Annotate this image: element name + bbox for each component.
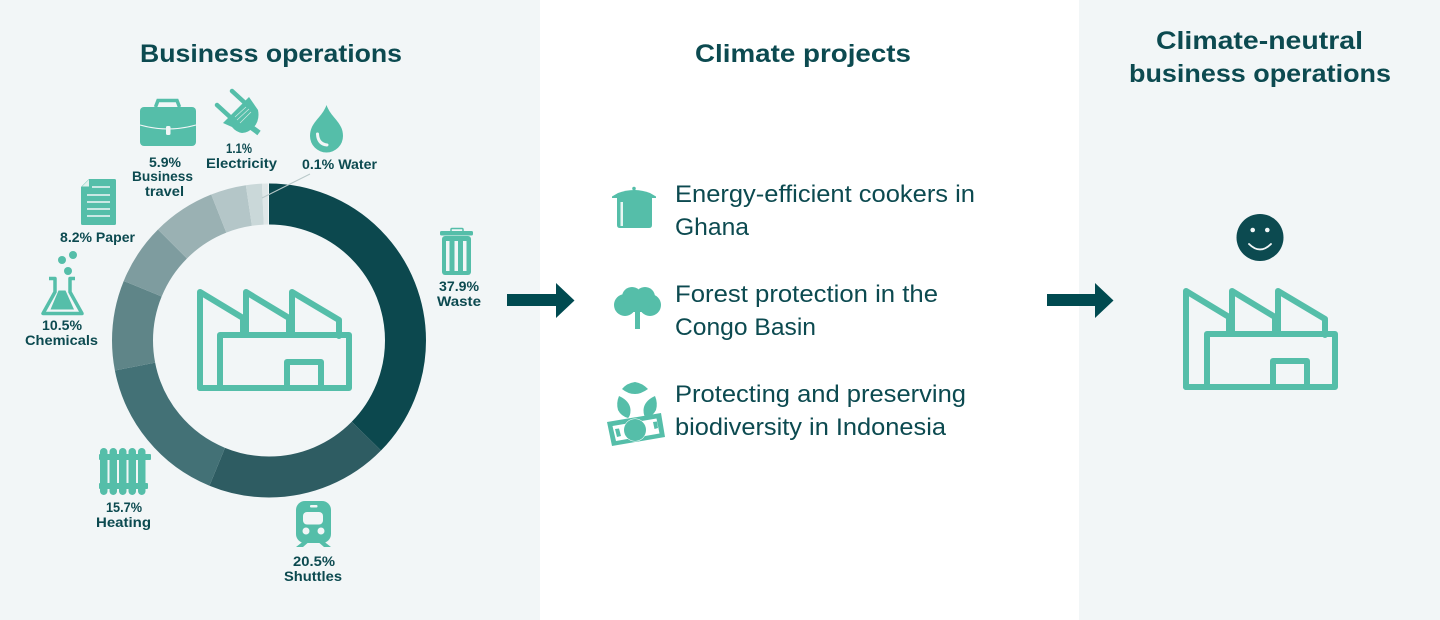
icon: briefcase [140,100,196,146]
icon: flask [43,251,82,314]
panel: climate projects background [540,0,1079,620]
panel: business operations background [0,0,540,620]
label: shuttles: 20.5% [293,553,336,569]
label: water [302,105,378,172]
project: cookers: Energy-efficient cookers in [675,181,975,208]
project: biodiversity: Protecting and preserving [675,381,966,408]
label: chemicals: Chemicals [25,332,98,348]
project: cookers [612,181,975,241]
label: water: 0.1% Water [302,156,378,172]
label: waste: Waste [437,293,481,309]
icon: radiator [99,448,151,495]
label: shuttles: Shuttles [284,568,342,584]
arrow: projects to neutral [1047,283,1114,318]
heading: Climate-neutral business operations: business operations [1129,60,1391,88]
label: chemicals [25,251,98,348]
label: waste: 37.9% [439,278,480,294]
leader line: water [262,174,310,198]
label: business travel: Business [132,168,193,184]
heading: Climate-neutral business operations: Climate-neutral [1156,27,1363,55]
icon: water drop [310,105,343,152]
project: forest [614,281,938,341]
label: chemicals: 10.5% [42,317,83,333]
label: business travel: 5.9% [149,154,182,170]
label: electricity: 1.1% [226,140,252,156]
icon: trash bin [440,228,473,275]
icon: smiley [1236,214,1284,261]
label: waste [437,228,481,309]
donut chart [132,204,406,477]
label: business travel [132,100,196,199]
label: shuttles [284,501,342,584]
project: forest: Congo Basin [675,314,816,341]
heading: Climate-neutral business operations [1129,27,1391,88]
icon: banknote and leaves [607,382,665,446]
label: paper [60,179,136,245]
icon: plug [217,91,259,133]
label: electricity [206,91,277,171]
icon: document [81,179,116,225]
icon: tree [614,287,661,329]
icon: train [296,501,331,547]
project: biodiversity: biodiversity in Indonesia [675,414,947,441]
project: biodiversity [607,381,966,446]
icon: factory right [1186,291,1335,387]
label: electricity: Electricity [206,155,277,171]
project: forest: Forest protection in the [675,281,938,308]
label: heating: Heating [96,514,151,530]
label: heating [96,448,151,530]
label: paper: 8.2% Paper [60,229,136,245]
label: business travel: travel [145,183,184,199]
arrow: operations to projects [507,283,574,318]
icon: cooking pot [612,187,656,228]
label: heating: 15.7% [106,499,142,515]
heading: Business operations: Business operations [140,40,402,68]
panel: climate-neutral background [1079,0,1440,620]
icon: factory in donut [200,292,349,388]
project: cookers: Ghana [675,214,750,241]
heading: Climate projects: Climate projects [695,40,911,68]
